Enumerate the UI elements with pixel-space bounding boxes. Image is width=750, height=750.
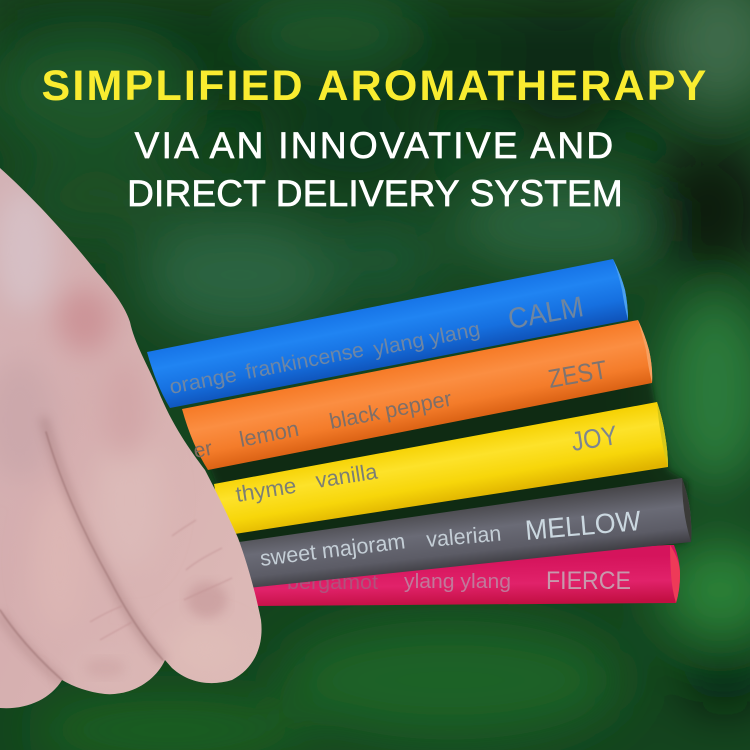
shadow behind and between the sticks [200,375,688,600]
blue stick: CALM [147,259,628,408]
orange stick: ZEST: ZEST [546,354,609,394]
knuckle wrinkles [90,520,232,640]
heading: yellow title: SIMPLIFIED AROMATHERAPY [42,62,708,110]
yellow stick: JOY: thyme [234,473,298,507]
hand: clenched fist holding the sticks [0,168,262,708]
pink stick: FIERCE: bergamot [287,572,378,594]
finger grooves [0,420,163,682]
subheading: delivery system lines [127,125,623,214]
yellow stick: JOY: JOY [569,420,619,457]
gray stick: MELLOW: valerian [425,521,502,552]
gray stick: MELLOW: sweet majoram [259,528,407,571]
orange stick: ZEST [182,320,652,470]
yellow stick: JOY [214,402,668,535]
gray stick: MELLOW [239,478,691,588]
blue stick: CALM: orange [168,363,239,399]
yellow stick: JOY: vanilla [314,458,380,493]
blue stick: CALM: CALM [506,291,586,336]
pink stick: FIERCE: FIERCE [546,567,631,595]
blue stick: CALM: ylang ylang [372,318,482,361]
pink stick: FIERCE: ylang ylang [404,571,511,593]
orange stick: ZEST: black pepper [327,386,454,434]
subheading: delivery system lines: DIRECT DELIVERY SYSTEM [127,173,623,214]
orange stick: ZEST: lemon [237,416,301,452]
pink stick: FIERCE [250,545,680,606]
subheading: delivery system lines: VIA AN INNOVATIVE AND [135,125,615,166]
gray stick: MELLOW: MELLOW [524,505,643,546]
orange stick: ZEST: er [192,437,214,463]
blue stick: CALM: frankincense [244,338,366,384]
